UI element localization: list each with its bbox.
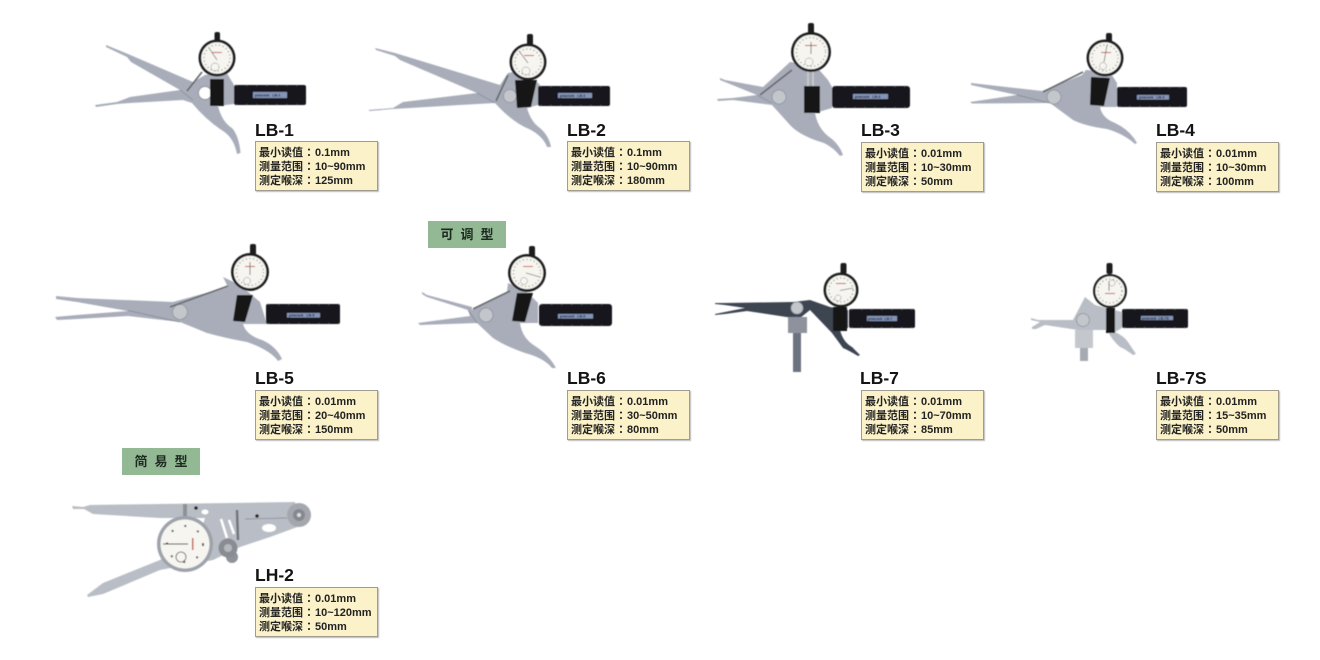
heading: LB-7: LB-7 <box>860 368 899 388</box>
spec box: LB-1: 测定喉深 125mm <box>259 175 353 187</box>
spec box: LB-7S <box>1156 390 1279 440</box>
tool: LB-6 <box>418 246 612 368</box>
spec box: LB-1: 测量范围 10~90mm <box>259 161 365 173</box>
spec box: LB-3: 测定喉深 50mm <box>865 176 953 188</box>
tool: LB-4: peacock LB-4 <box>1139 96 1164 100</box>
spec box: LH-2: 测量范围 10~120mm <box>259 607 372 619</box>
spec box: LH-2: 最小读值 0.01mm <box>259 593 356 605</box>
spec box: LB-2: 测定喉深 180mm <box>571 175 665 187</box>
heading: LB-1: LB-1 <box>255 120 294 140</box>
spec box: LB-2: 测量范围 10~90mm <box>571 161 677 173</box>
spec box: LB-7 <box>861 390 984 440</box>
tool: LB-7S: peacock LB-7S <box>1142 316 1169 320</box>
spec box: LB-5: 测量范围 20~40mm <box>259 410 365 422</box>
tool: LB-7: peacock LB-7 <box>868 317 892 321</box>
spec box: LB-5: 最小读值 0.01mm <box>259 396 356 408</box>
spec box: LB-4 <box>1156 142 1279 192</box>
spec box: LB-6: 测量范围 30~50mm <box>571 410 677 422</box>
heading: LB-4: LB-4 <box>1156 120 1195 140</box>
heading: LH-2: LH-2 <box>255 565 294 585</box>
badge: simple type <box>122 448 200 475</box>
tool: LB-3: peacock LB-3 <box>855 95 880 99</box>
spec box: LB-1: 最小读值 0.1mm <box>259 147 350 159</box>
spec box: LH-2 <box>255 587 378 637</box>
spec box: LB-4: 最小读值 0.01mm <box>1160 148 1257 160</box>
spec box: LB-4: 测量范围 10~30mm <box>1160 162 1266 174</box>
tool: LB-4 <box>970 33 1187 144</box>
spec box: LB-2: 最小读值 0.1mm <box>571 147 662 159</box>
spec box: LB-3: 最小读值 0.01mm <box>865 148 962 160</box>
spec box: LB-7S: 测定喉深 50mm <box>1160 424 1248 436</box>
tool: LB-2 <box>368 34 610 147</box>
heading: LB-2: LB-2 <box>567 120 606 140</box>
spec box: LB-5: 测定喉深 150mm <box>259 424 353 436</box>
spec box: LB-7S: 测量范围 15~35mm <box>1160 410 1266 422</box>
tool: LB-2: peacock LB-2 <box>560 94 585 98</box>
tool: LB-1: peacock LB-1 <box>255 94 280 98</box>
spec box: LB-4: 测定喉深 100mm <box>1160 176 1254 188</box>
spec box: LB-6: 测定喉深 80mm <box>571 424 659 436</box>
spec box: LH-2: 测定喉深 50mm <box>259 621 347 633</box>
spec box: LB-7S: 最小读值 0.01mm <box>1160 396 1257 408</box>
spec box: LB-3 <box>861 142 984 192</box>
spec box: LB-7: 测量范围 10~70mm <box>865 410 971 422</box>
badge: adjustable type: 可调型 <box>440 227 500 242</box>
heading: LB-3: LB-3 <box>861 120 900 140</box>
spec box: LB-5 <box>255 390 378 440</box>
spec box: LB-6: 最小读值 0.01mm <box>571 396 668 408</box>
tool: LB-5 <box>55 244 340 361</box>
tool: LH-2 <box>72 502 311 597</box>
spec box: LB-3: 测量范围 10~30mm <box>865 162 971 174</box>
tool: LB-7S <box>1031 263 1188 361</box>
tool: LB-5: peacock LB-5 <box>289 314 314 318</box>
spec box: LB-7: 最小读值 0.01mm <box>865 396 962 408</box>
spec box: LB-7: 测定喉深 85mm <box>865 424 953 436</box>
heading: LB-5: LB-5 <box>255 368 294 388</box>
tool: LB-7 <box>715 263 915 372</box>
spec box: LB-6 <box>567 390 690 440</box>
heading: LB-6: LB-6 <box>567 368 606 388</box>
spec box: LB-1 <box>255 141 378 191</box>
heading: LB-7S: LB-7S <box>1156 368 1207 388</box>
badge: adjustable type <box>428 221 506 248</box>
tool: LB-1 <box>95 32 306 154</box>
spec box: LB-2 <box>567 141 690 191</box>
badge: simple type: 简易型 <box>134 454 194 469</box>
tool: LB-3 <box>717 23 910 156</box>
tool: LB-6: peacock LB-6 <box>560 315 585 319</box>
